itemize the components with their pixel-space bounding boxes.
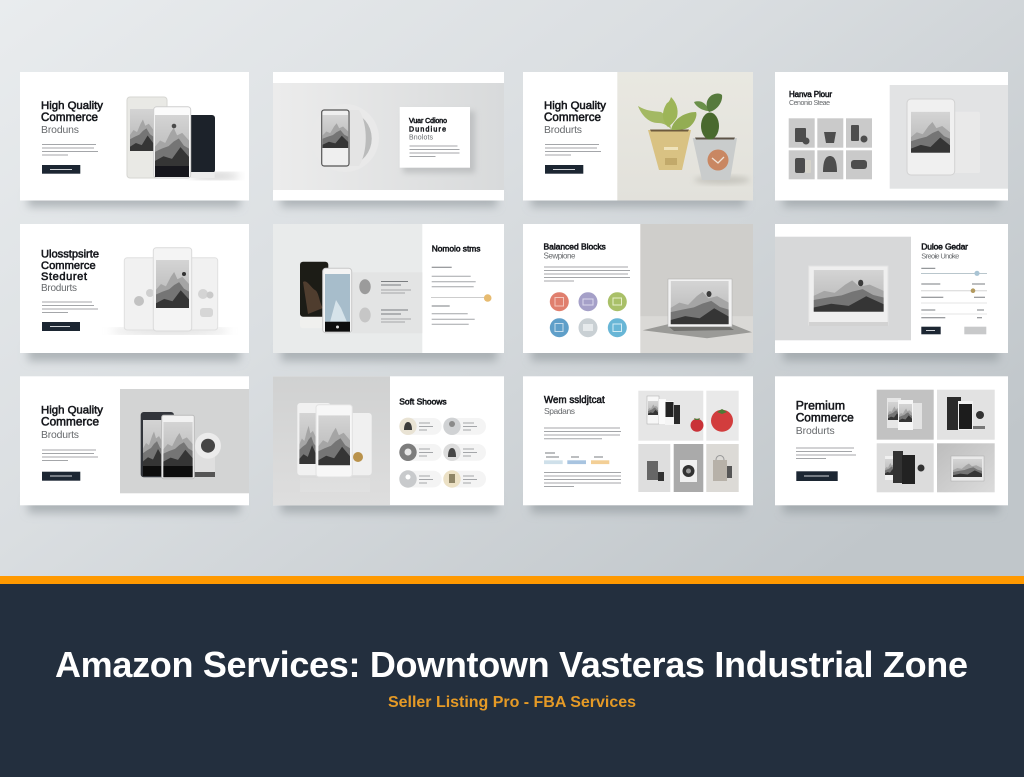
background: [0, 0, 1024, 577]
body text lines: [544, 428, 621, 439]
panel: slide 12: [775, 376, 1008, 505]
image: monitor: [775, 237, 911, 340]
image tile: tomato: [706, 391, 739, 441]
button: [42, 472, 80, 481]
heading: High Quality: [41, 405, 103, 417]
body text lines: [544, 472, 621, 486]
image tile: phones and tomato: [638, 391, 704, 441]
callout card: [400, 107, 475, 173]
heading: [789, 90, 832, 107]
heading: High Quality: [544, 100, 606, 112]
heading: Duloe Gedar: [921, 242, 968, 252]
heading: [41, 248, 99, 294]
heading: high quality commerce: [41, 100, 103, 136]
image tile: monitor: [937, 443, 995, 492]
image tile: phones and camera: [877, 443, 934, 492]
heading: Brodurts: [544, 125, 582, 136]
body text lines: [544, 267, 630, 281]
panel: slide 3: [523, 72, 753, 200]
button: [42, 165, 80, 174]
image tile: bottle: [638, 444, 670, 492]
accent stripe: [0, 576, 1024, 584]
image: tablet: [890, 85, 1008, 189]
callout card: Dundiure: [409, 126, 446, 134]
heading: Brodurts: [41, 283, 77, 294]
heading: Commerce: [796, 411, 854, 425]
heading: Steduret: [41, 271, 87, 283]
image: potted plants: [638, 94, 750, 184]
panel: slide 4: [775, 72, 1008, 200]
title: Amazon Services: Downtown Vasteras Industrial Zone: [55, 644, 968, 685]
panel: slide 5: [20, 224, 249, 353]
heading: [921, 242, 968, 261]
panel: slide 7: [523, 224, 753, 353]
heading: [41, 405, 103, 441]
heading: Cenonio Steae: [789, 100, 830, 107]
profile pills: [399, 418, 486, 488]
heading: Ulosstpsirte: [41, 248, 99, 260]
phones: [127, 97, 240, 178]
heading: [796, 399, 854, 437]
phones and camera: [141, 412, 221, 479]
heading: Nomoio stms: [432, 244, 480, 254]
image tile: bag: [706, 444, 739, 492]
heading: Balanced Blocks: [544, 241, 606, 251]
heading: Wem ssldjtcat: [544, 395, 605, 406]
button: [796, 471, 838, 481]
heading: [544, 100, 606, 136]
heading: Sewpione: [544, 252, 576, 260]
body text lines: [796, 448, 856, 458]
body text lines: [42, 302, 98, 312]
heading: high quality commerce: High Quality: [41, 100, 103, 112]
heading: high quality commerce: Broduns: [41, 125, 79, 136]
heading: [544, 395, 605, 416]
heading: Brodurts: [41, 430, 79, 441]
button: [42, 322, 80, 331]
heading: Commerce: [41, 415, 99, 429]
text rows and slider: [431, 267, 492, 324]
image tile: phones: [877, 390, 934, 440]
mini table: [544, 453, 609, 464]
icon circles: [550, 292, 627, 337]
callout card: Bnolots: [409, 134, 434, 142]
panel: slide 9: [20, 376, 249, 505]
button: [545, 165, 583, 174]
heading: Premium: [796, 399, 845, 413]
panel: slide 2: [273, 72, 504, 200]
image tile: camera: [674, 444, 703, 492]
image: phone on disc: [311, 104, 379, 172]
heading: Brodurts: [796, 426, 835, 437]
heading: Commerce: [41, 260, 96, 272]
heading: Sreoie Unoke: [921, 252, 959, 261]
callout card: Vuar Cdiono: [409, 118, 447, 125]
body text lines: [42, 450, 98, 460]
banner: [0, 576, 1024, 777]
image: phones and side panel: [300, 262, 422, 333]
panel: slide 1: [20, 72, 249, 200]
form controls: [921, 268, 987, 334]
heading: Commerce: [544, 111, 601, 124]
body text lines: [42, 144, 98, 155]
icon grid: [789, 118, 872, 179]
panel: slide 10: [273, 376, 504, 505]
heading: Hanva Plour: [789, 90, 832, 99]
image: phones: [297, 403, 372, 492]
panel: slide 8: [775, 224, 1008, 353]
heading: Spadans: [544, 406, 575, 416]
card shadows: [28, 192, 999, 513]
panel: slide 6: [273, 224, 504, 353]
heading: [544, 241, 606, 260]
heading: high quality commerce: Commerce: [41, 111, 98, 124]
heading: Soft Shoows: [399, 397, 447, 407]
phones: [110, 248, 230, 333]
subtitle: Seller Listing Pro - FBA Services: [388, 694, 636, 711]
panel: slide 11: [523, 376, 753, 505]
body text lines: [545, 144, 601, 155]
image: laptop: [643, 279, 752, 338]
image tile: dark phones: [937, 390, 995, 440]
